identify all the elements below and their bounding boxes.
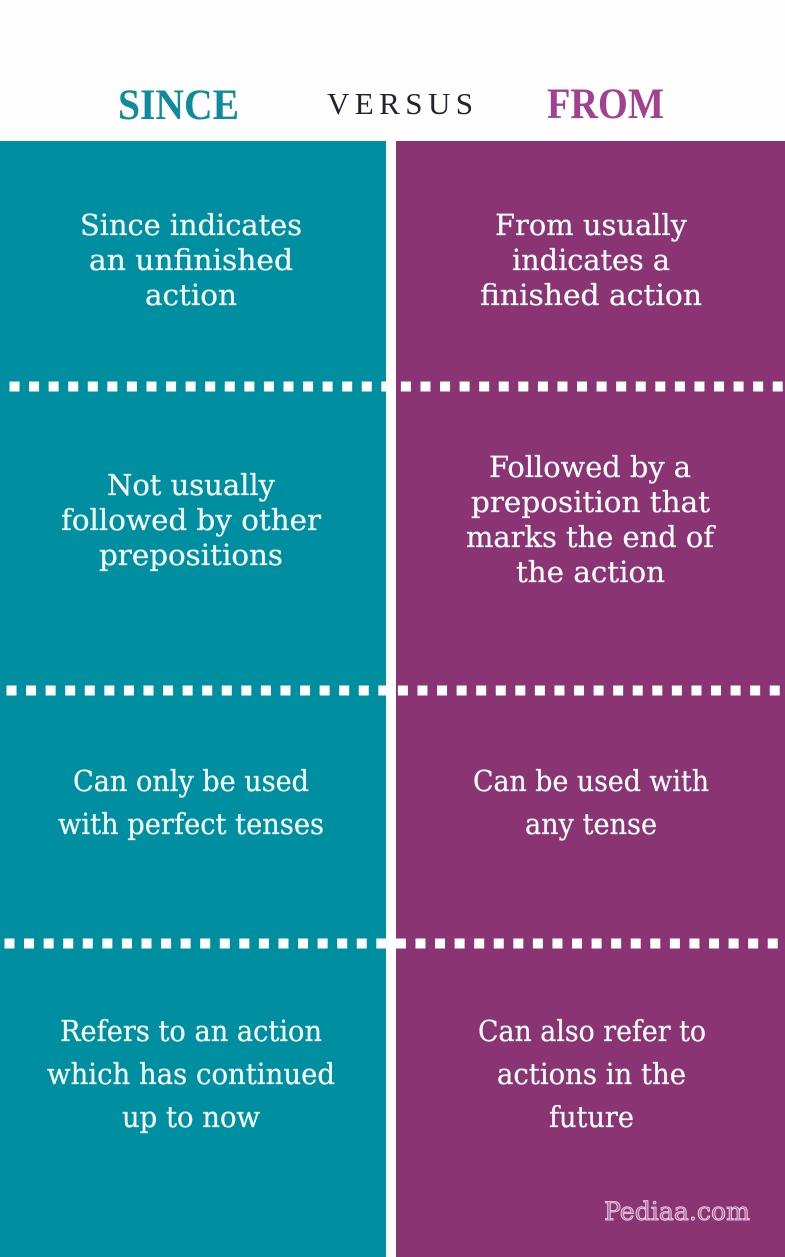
text block: from row 4: future — [549, 1100, 634, 1134]
panel: since column — [0, 141, 386, 1257]
text block: from row 4 — [478, 1014, 706, 1134]
text block: since row 4: Refers to an action — [60, 1014, 322, 1048]
text block: from row 2: the action — [516, 555, 665, 589]
text block: from row 1: From usually — [495, 208, 688, 242]
text block: from row 2: marks the end of — [466, 520, 716, 554]
text block: from row 4: Can also refer to — [478, 1014, 706, 1048]
text block: since row 1 — [80, 208, 302, 312]
heading: VERSUS: VERSUS — [327, 86, 473, 121]
logo: Pediaa.com: Pediaa.com — [604, 1197, 750, 1226]
text block: from row 1: finished action — [480, 278, 702, 312]
text block: since row 1: action — [145, 278, 237, 312]
text block: since row 3 — [58, 764, 324, 841]
text block: from row 2: Followed by a — [489, 450, 691, 484]
text block: from row 1 — [480, 208, 702, 312]
text block: since row 3: Can only be used — [73, 764, 309, 798]
heading: SINCE: SINCE — [118, 82, 239, 129]
text block: since row 3: with perfect tenses — [58, 807, 324, 841]
text block: from row 3 — [473, 764, 709, 841]
text block: since row 4: up to now — [122, 1100, 260, 1134]
text block: since row 2: prepositions — [99, 538, 283, 572]
text block: since row 1: an unfinished — [89, 243, 293, 277]
text block: since row 1: Since indicates — [80, 208, 302, 242]
text block: since row 2: followed by other — [61, 503, 321, 537]
text block: since row 2: Not usually — [107, 468, 276, 502]
text block: from row 2: preposition that — [471, 485, 710, 519]
panel: from column — [396, 141, 785, 1257]
text block: since row 4: which has continued — [47, 1057, 335, 1091]
text block: since row 2 — [61, 468, 321, 572]
text block: from row 3: any tense — [525, 807, 657, 841]
text block: from row 2 — [466, 450, 716, 589]
text block: from row 4: actions in the — [497, 1057, 686, 1091]
text block: from row 1: indicates a — [512, 243, 670, 277]
heading: FROM: FROM — [547, 81, 664, 128]
text block: from row 3: Can be used with — [473, 764, 709, 798]
text block: since row 4 — [47, 1014, 335, 1134]
